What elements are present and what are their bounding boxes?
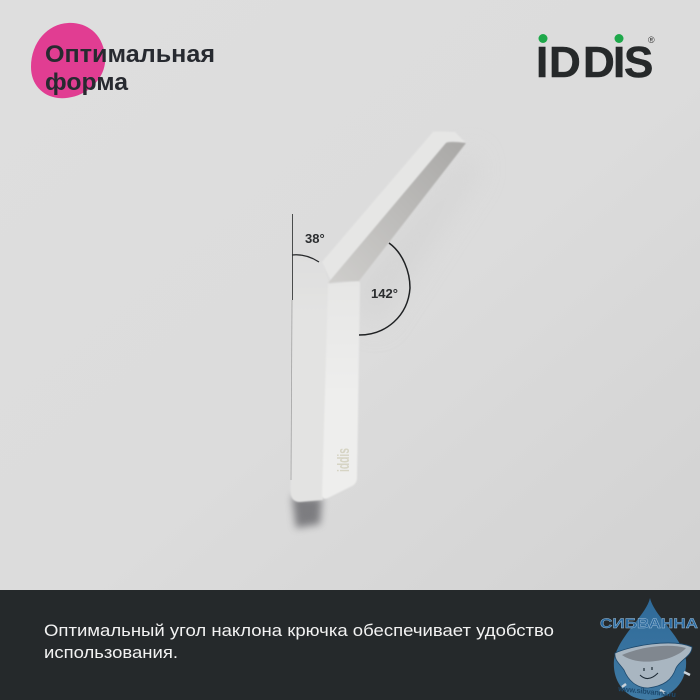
- logo wordmark: IDDIS: [536, 38, 653, 87]
- title: Оптимальная: [45, 41, 215, 68]
- bathtub: [615, 643, 692, 688]
- water drop: [614, 598, 686, 700]
- logo dots: [538, 34, 548, 43]
- IDDIS logo: [536, 34, 655, 87]
- title: форма: [45, 69, 129, 96]
- pink blob: [31, 23, 105, 98]
- label 142: 142°: [371, 286, 398, 301]
- hook: plate side face: [290, 256, 330, 502]
- bottom caption band: [0, 590, 700, 700]
- hook shadow on wall: [292, 150, 480, 528]
- watermark: Sibvanna logo: [600, 598, 698, 700]
- website: www.sibvanna.ru: [617, 684, 677, 699]
- hook: front plate: [322, 281, 360, 499]
- hook: arm top face: [322, 132, 466, 281]
- arc 142: [359, 243, 410, 335]
- label 38: 38°: [305, 231, 325, 246]
- vertical reference line: [292, 214, 294, 300]
- registered mark: ®: [648, 35, 655, 45]
- angle annotation: 142 degrees: [359, 243, 410, 335]
- bathtub inner: [622, 646, 686, 662]
- hook: arm underside: [328, 142, 466, 283]
- arc 38: [292, 255, 319, 262]
- hook: engraved logo: iddis: [334, 448, 353, 472]
- angle annotation: 38 degrees: [291, 214, 325, 480]
- plate edge line: [291, 300, 292, 480]
- brand name: СИБВАННА: [600, 615, 698, 631]
- caption text: Оптимальный угол наклона крючка обеспечивает удобство: [44, 621, 554, 640]
- white hook: [290, 132, 466, 502]
- smile: [640, 673, 658, 679]
- heading with pink blob: [31, 23, 222, 98]
- caption text: использования.: [44, 643, 178, 662]
- bathtub feet: [622, 672, 690, 693]
- bathtub eyes: [644, 667, 652, 671]
